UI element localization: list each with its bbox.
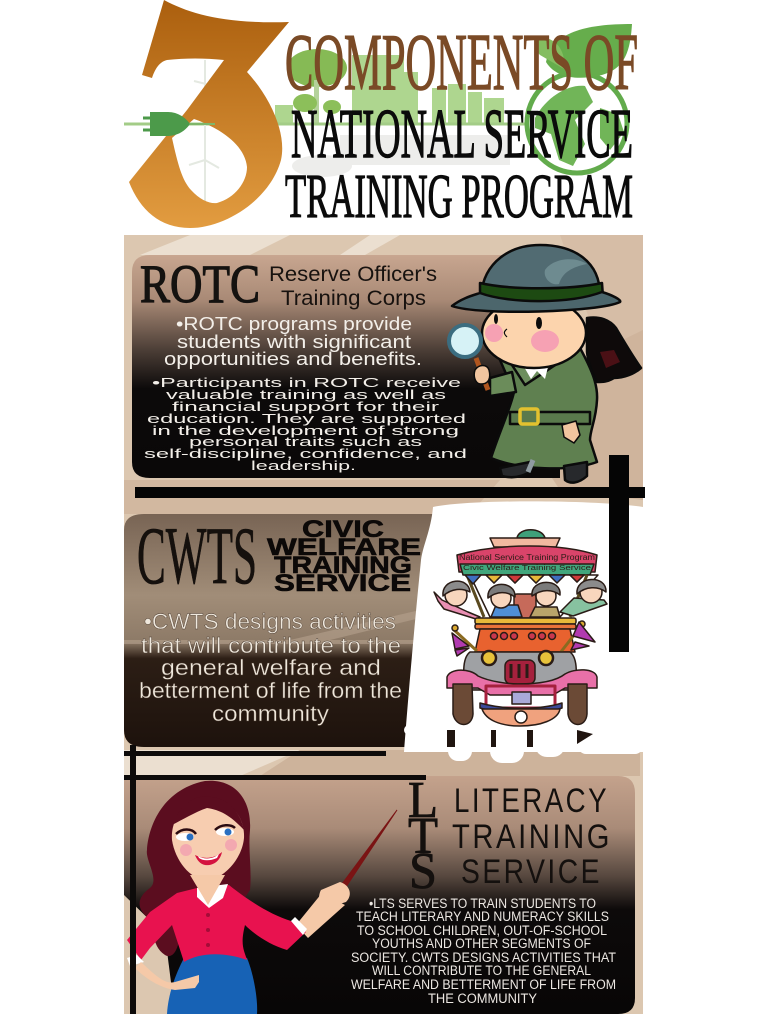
CWTS description: that will contribute to the xyxy=(141,633,401,658)
ROTC second bullet: leadership. xyxy=(251,458,356,473)
panel: LTS xyxy=(124,772,635,1014)
ROTC first bullet: •ROTC programs provide xyxy=(176,314,412,334)
ROTC second bullet: •Participants in ROTC receive xyxy=(152,375,461,390)
LTS full name: SERVICE xyxy=(461,853,602,891)
ROTC acronym: ROTC xyxy=(140,254,260,314)
vertical rule at left of LTS xyxy=(130,745,136,1014)
ROTC second bullet: financial support for their xyxy=(172,399,440,414)
CWTS card xyxy=(124,514,600,747)
vertical black bar on the right xyxy=(609,455,629,652)
CWTS full name: TRAINING xyxy=(274,552,412,579)
LTS full name: LITERACY xyxy=(454,782,609,820)
ROTC first bullet xyxy=(164,314,422,369)
LTS stacked acronym: L xyxy=(408,772,438,829)
LTS full name xyxy=(452,782,612,891)
LTS description: WELFARE AND BETTERMENT OF LIFE FROM xyxy=(351,977,616,992)
CWTS description: community xyxy=(212,701,329,726)
LTS description: TO SCHOOL CHILDREN, OUT-OF-SCHOOL xyxy=(357,923,607,938)
beige content panel background xyxy=(124,235,643,1014)
LTS description: WILL CONTRIBUTE TO THE GENERAL xyxy=(372,963,591,978)
LTS description: THE COMMUNITY xyxy=(428,991,537,1006)
illustration: teacher with pointer xyxy=(127,781,397,1014)
CWTS full name xyxy=(267,516,421,597)
CWTS full name: CIVIC xyxy=(302,516,384,543)
ROTC full name: Reserve Officer's xyxy=(269,263,437,286)
ROTC second bullet: in the development of strong xyxy=(152,423,459,438)
illustration: jeepney: Civic Welfare Training Service xyxy=(463,565,591,572)
divider bar under ROTC xyxy=(135,487,645,498)
panel: ROTC xyxy=(132,245,641,483)
horizontal rule over LTS xyxy=(124,775,426,780)
thin divider under CWTS xyxy=(124,751,386,756)
big number 3 xyxy=(129,0,289,228)
LTS description xyxy=(351,896,616,1006)
icon: power plug xyxy=(143,112,215,136)
illustration: jeepney: National Service Training Program xyxy=(459,553,595,562)
CWTS full name: SERVICE xyxy=(274,570,411,597)
panel: CWTS xyxy=(124,501,643,763)
CWTS description: general welfare and xyxy=(161,655,381,680)
CWTS acronym: CWTS xyxy=(137,510,257,601)
white brush area behind jeepney xyxy=(404,501,643,763)
LTS card xyxy=(124,776,635,1014)
header: title with eco city backdrop xyxy=(124,0,638,231)
LTS stacked acronym xyxy=(408,772,438,900)
illustration: detective with magnifying glass xyxy=(449,245,641,483)
CWTS description xyxy=(139,609,402,726)
light streaks on CWTS card xyxy=(124,610,420,644)
LTS description: YOUTHS AND OTHER SEGMENTS OF xyxy=(372,936,591,951)
ROTC second bullet: education. They are supported xyxy=(147,411,466,426)
LTS full name: TRAINING xyxy=(452,818,612,856)
CWTS description: •CWTS designs activities xyxy=(144,609,396,634)
ROTC second bullet: personal traits such as xyxy=(189,434,423,449)
ROTC second bullet xyxy=(144,375,467,473)
CWTS full name: WELFARE xyxy=(267,534,421,561)
ROTC second bullet: self-discipline, confidence, and xyxy=(144,446,467,461)
CWTS peeking dark strips xyxy=(447,730,593,747)
ROTC full name: Training Corps xyxy=(281,287,426,310)
LTS description: •LTS SERVES TO TRAIN STUDENTS TO xyxy=(369,896,596,911)
LTS stacked acronym: S xyxy=(409,843,437,900)
LTS description: TEACH LITERARY AND NUMERACY SKILLS xyxy=(356,909,609,924)
ROTC first bullet: students with significant xyxy=(177,332,411,352)
CWTS description: betterment of life from the xyxy=(139,678,402,703)
LTS description: SOCIETY. CWTS DESIGNS ACTIVITIES THAT xyxy=(351,950,616,965)
backdrop: green city and globe xyxy=(124,24,632,205)
ROTC second bullet: valuable training as well as xyxy=(166,387,447,402)
LTS stacked acronym: T xyxy=(408,808,438,865)
ROTC card xyxy=(132,255,560,478)
beige wedge behind teacher xyxy=(124,895,175,1014)
ROTC first bullet: opportunities and benefits. xyxy=(164,349,422,369)
illustration: jeepney xyxy=(434,530,607,726)
ROTC full name xyxy=(269,263,437,310)
